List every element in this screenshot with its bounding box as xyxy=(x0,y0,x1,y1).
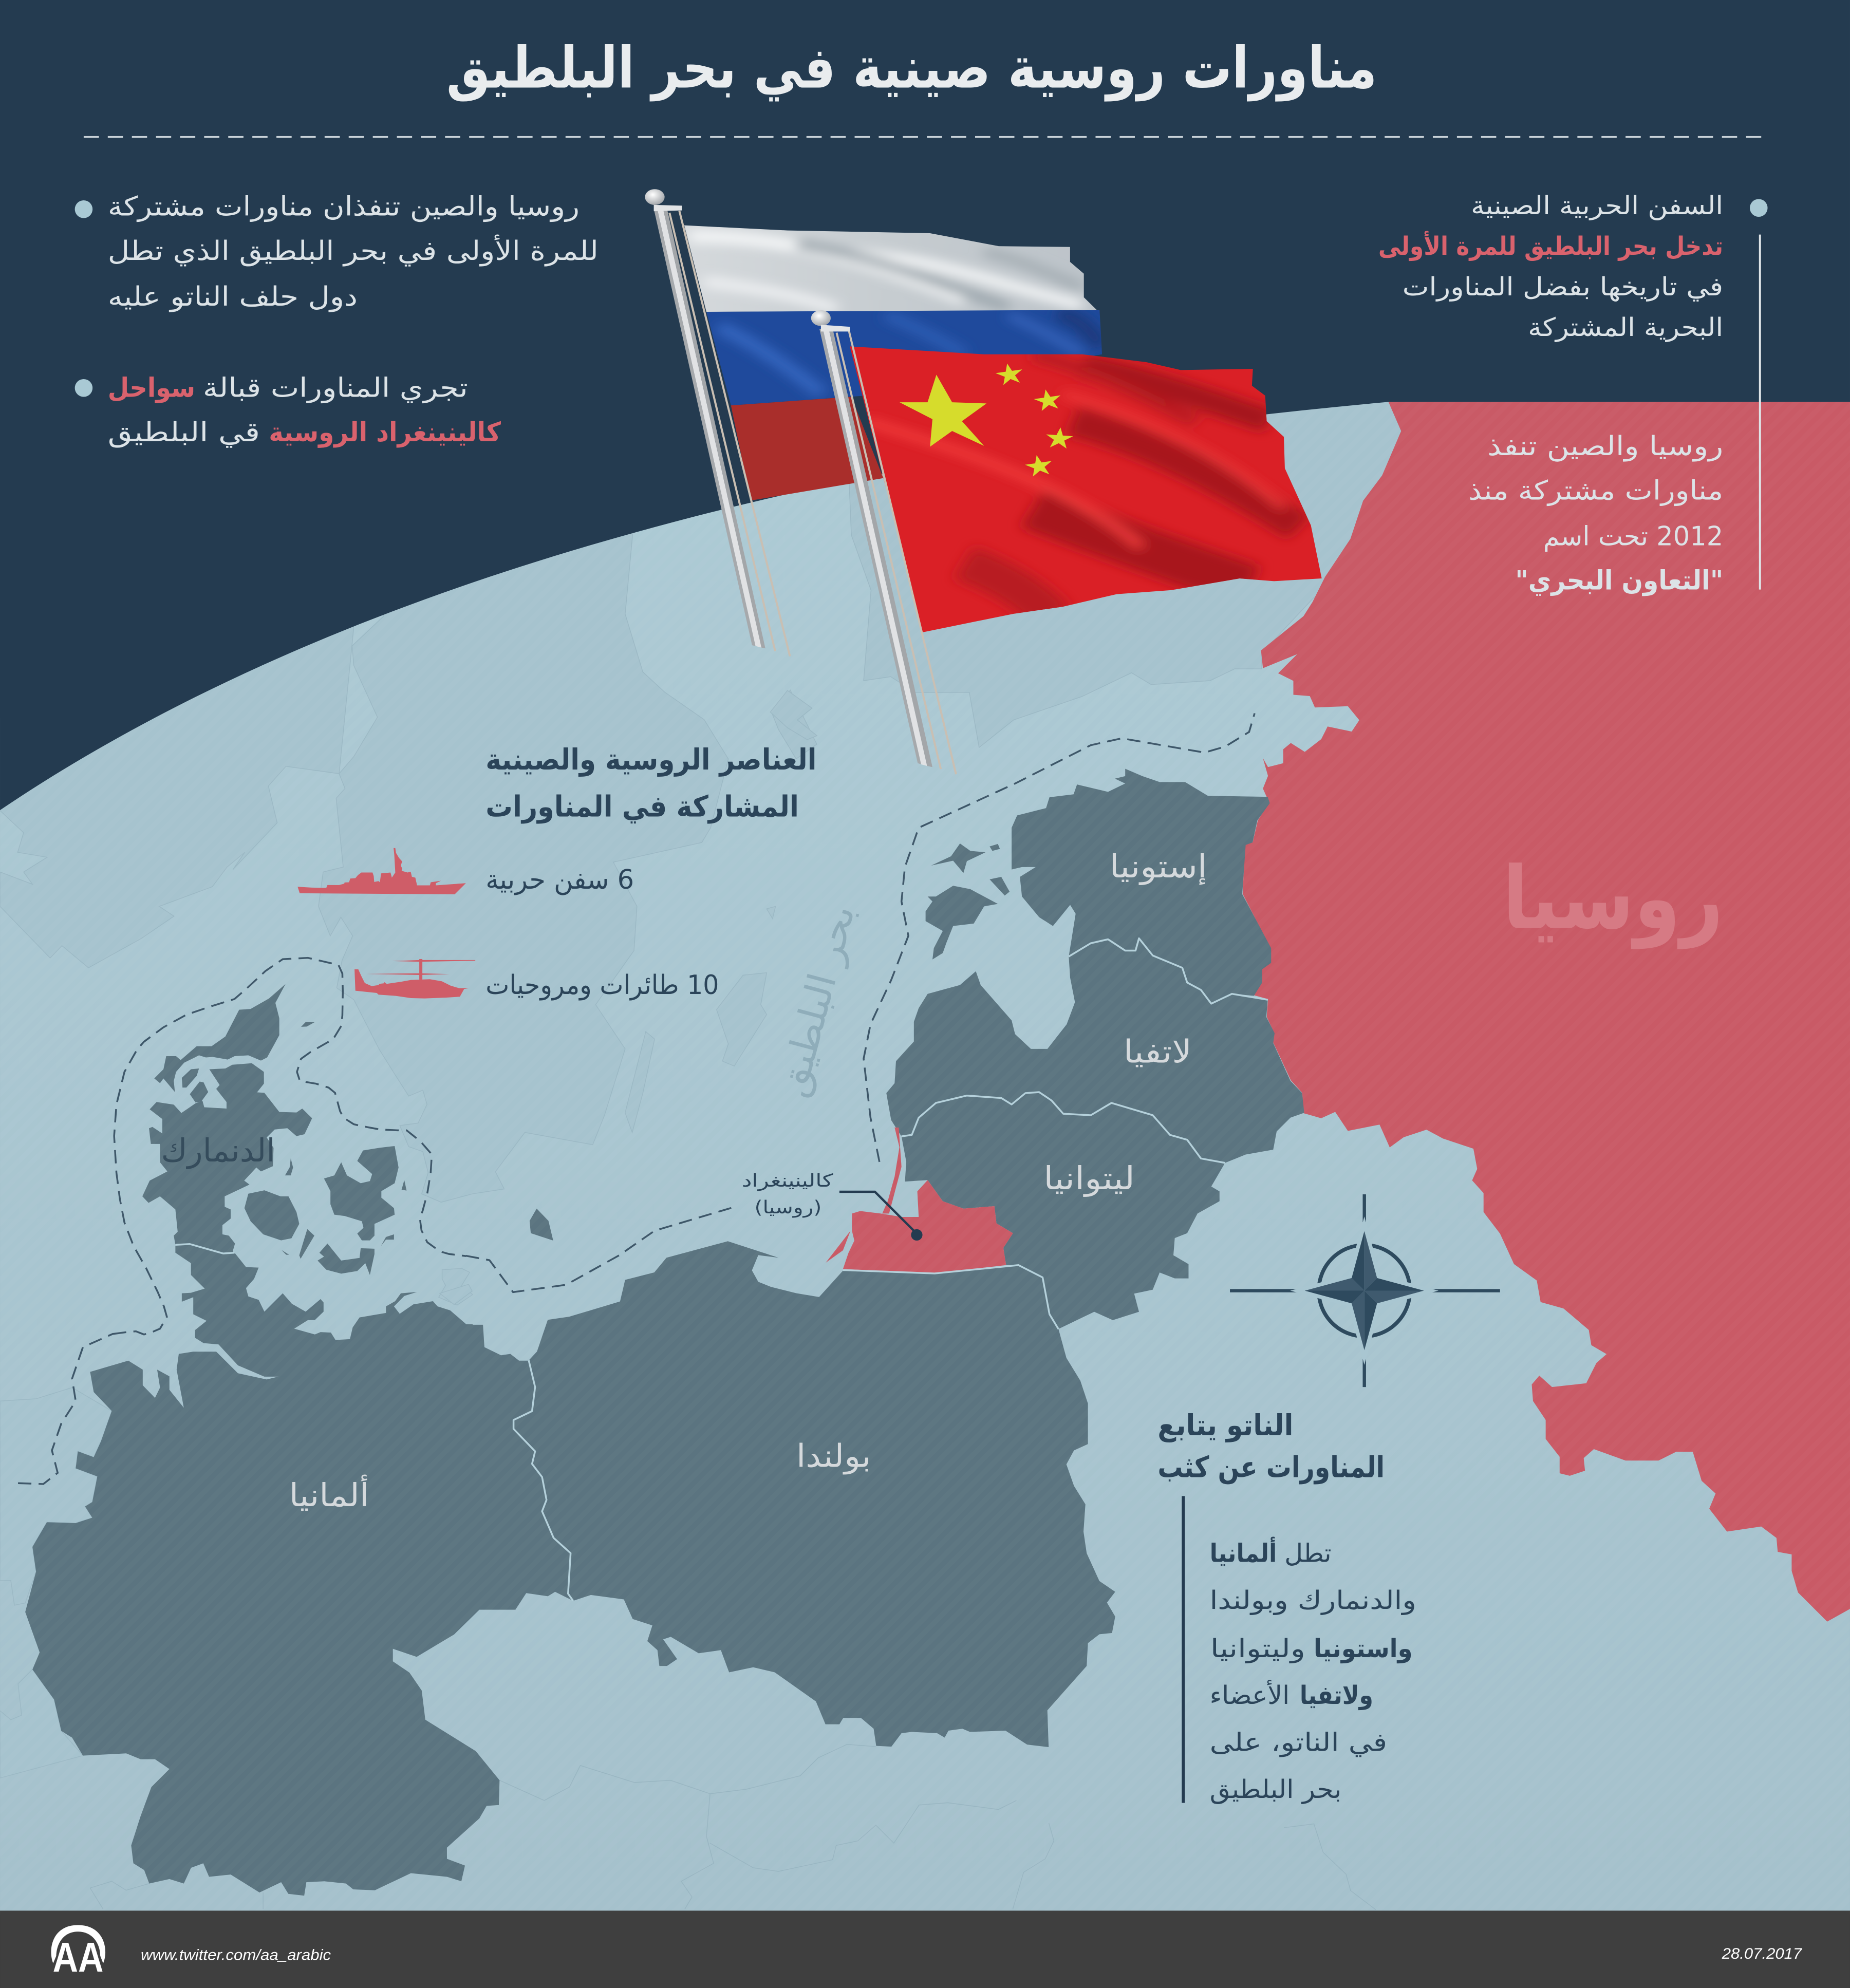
country: Denmark xyxy=(142,984,473,1377)
icon: AA logo: AA xyxy=(53,1935,103,1981)
text block: maritime cooperation: مناورات مشتركة منذ xyxy=(1468,475,1723,506)
text block: right intro: البحرية المشتركة xyxy=(1528,312,1723,342)
text block: maritime cooperation xyxy=(1468,431,1723,596)
panel: NATO note xyxy=(1157,1409,1416,1804)
icon: NATO compass xyxy=(1230,1194,1500,1387)
bullet xyxy=(75,200,92,218)
text block: maritime cooperation: 2012 تحت اسم xyxy=(1543,521,1723,552)
text block: left intro: للمرة الأولى في بحر البلطيق الذي تطل xyxy=(108,234,599,267)
icon: warship xyxy=(297,848,466,894)
text block: maritime cooperation: روسيا والصين تنفذ xyxy=(1487,431,1723,462)
text block: left coast note: كالينينغراد الروسية xyxy=(269,417,501,448)
texture: diagonal stripes xyxy=(0,380,1850,1910)
cloth folds xyxy=(866,354,1299,617)
body text: والدنمارك وبولندا xyxy=(1210,1585,1416,1615)
heading: العناصر الروسية والصينية xyxy=(485,743,816,777)
label: Lithuania: ليتوانيا xyxy=(1043,1160,1135,1197)
Estonian islands xyxy=(926,843,1010,960)
ropes xyxy=(836,331,956,774)
text block: right intro xyxy=(1378,191,1768,342)
text block: left intro xyxy=(75,192,599,312)
body text: تطل xyxy=(1284,1539,1332,1568)
footer bar xyxy=(0,1910,1850,1988)
body text: الأعضاء xyxy=(1210,1679,1290,1710)
heading: المشاركة في المناورات xyxy=(485,790,799,823)
faint neighbouring countries xyxy=(0,366,1456,1910)
pole xyxy=(819,329,932,767)
heading: الناتو يتابع xyxy=(1157,1409,1293,1442)
text block: left coast note: سواحل xyxy=(108,373,195,404)
Danish islands xyxy=(245,1022,406,1275)
body text: ألمانيا xyxy=(1210,1537,1277,1568)
text: ships count: 6 سفن حربية xyxy=(485,865,634,895)
pole xyxy=(654,209,765,648)
icon: helicopter xyxy=(354,959,475,999)
country: Lithuania xyxy=(902,1092,1225,1329)
heading xyxy=(1157,1409,1385,1484)
header background: navy arc xyxy=(0,0,1850,810)
label: Estonia: إستونيا xyxy=(1110,848,1207,886)
red cloth xyxy=(850,346,1322,632)
blue stripe xyxy=(706,310,1102,405)
country: Estonia xyxy=(1012,769,1271,1004)
date: 28.07.2017 xyxy=(1722,1945,1803,1962)
location dot xyxy=(911,1229,923,1241)
label: Poland: بولندا xyxy=(796,1438,871,1475)
route: dashed shipping line xyxy=(18,713,1255,1484)
text block: left intro: دول حلف الناتو عليه xyxy=(108,282,358,312)
body text: في الناتو، على xyxy=(1210,1727,1387,1757)
country: Russia xyxy=(1243,402,1850,1622)
text block: left coast note xyxy=(75,373,501,448)
red stripe xyxy=(731,397,883,500)
text block: maritime cooperation: "التعاون البحري" xyxy=(1515,566,1723,596)
finial xyxy=(645,189,665,205)
country: Germany xyxy=(25,1325,573,1896)
finial xyxy=(811,310,831,326)
heading xyxy=(485,743,816,823)
label: Latvia: لاتفيا xyxy=(1124,1033,1192,1070)
label: Germany: ألمانيا xyxy=(289,1474,369,1514)
body text: ولاتفيا xyxy=(1300,1680,1373,1711)
countries: Germany, Poland, Denmark, Baltics xyxy=(18,713,1304,1896)
panel: participating forces xyxy=(297,743,816,1001)
Curonian and Vistula spits xyxy=(826,1128,902,1263)
label: Russia: روسيا xyxy=(1503,848,1723,949)
body text: بحر البلطيق xyxy=(1210,1774,1341,1804)
heading: المناورات عن كثب xyxy=(1157,1450,1385,1484)
text block: left coast note: تجري المناورات قبالة xyxy=(203,373,468,404)
text block: left coast note: قي البلطيق xyxy=(108,417,260,448)
country: Poland xyxy=(514,1241,1115,1747)
border: Denmark and Germany xyxy=(175,1244,235,1253)
text block: right intro: السفن الحربية الصينية xyxy=(1471,191,1723,220)
leader line xyxy=(839,1192,917,1233)
stars xyxy=(900,362,1074,477)
bullet xyxy=(1750,199,1768,217)
country: Kaliningrad xyxy=(843,1180,1013,1273)
title: مناورات روسية صينية في بحر البلطيق xyxy=(446,35,1377,101)
ropes xyxy=(669,211,790,657)
body text: وليتوانيا xyxy=(1210,1634,1305,1663)
label: Baltic Sea: بحر البلطيق xyxy=(770,900,864,1101)
callout: Kaliningrad: كالينينغراد xyxy=(742,1171,833,1191)
text block: left intro: روسيا والصين تنفذان مناورات مشتركة xyxy=(108,192,580,222)
borders of the Baltic states xyxy=(843,939,1268,1329)
country: Latvia xyxy=(886,939,1304,1163)
body text: واستونيا xyxy=(1314,1634,1412,1664)
text block: right intro: تدخل بحر البلطيق للمرة الأولى xyxy=(1378,230,1723,261)
border: Germany and Poland xyxy=(514,1360,573,1601)
flag: China xyxy=(811,310,1322,774)
island: Bornholm xyxy=(530,1209,553,1241)
text block: right intro: في تاريخها بفضل المناورات xyxy=(1403,272,1723,302)
body text xyxy=(1210,1537,1416,1804)
bullet xyxy=(75,379,92,397)
callout: Kaliningrad: (روسيا) xyxy=(755,1197,821,1218)
source link: www.twitter.com/aa_arabic xyxy=(141,1947,331,1964)
label: Denmark: الدنمارك xyxy=(161,1132,275,1169)
white stripe xyxy=(684,226,1097,312)
text: aircraft count: 10 طائرات ومروحيات xyxy=(485,970,719,1001)
flag: Russia xyxy=(645,189,1102,657)
callout: Kaliningrad xyxy=(742,1171,923,1241)
